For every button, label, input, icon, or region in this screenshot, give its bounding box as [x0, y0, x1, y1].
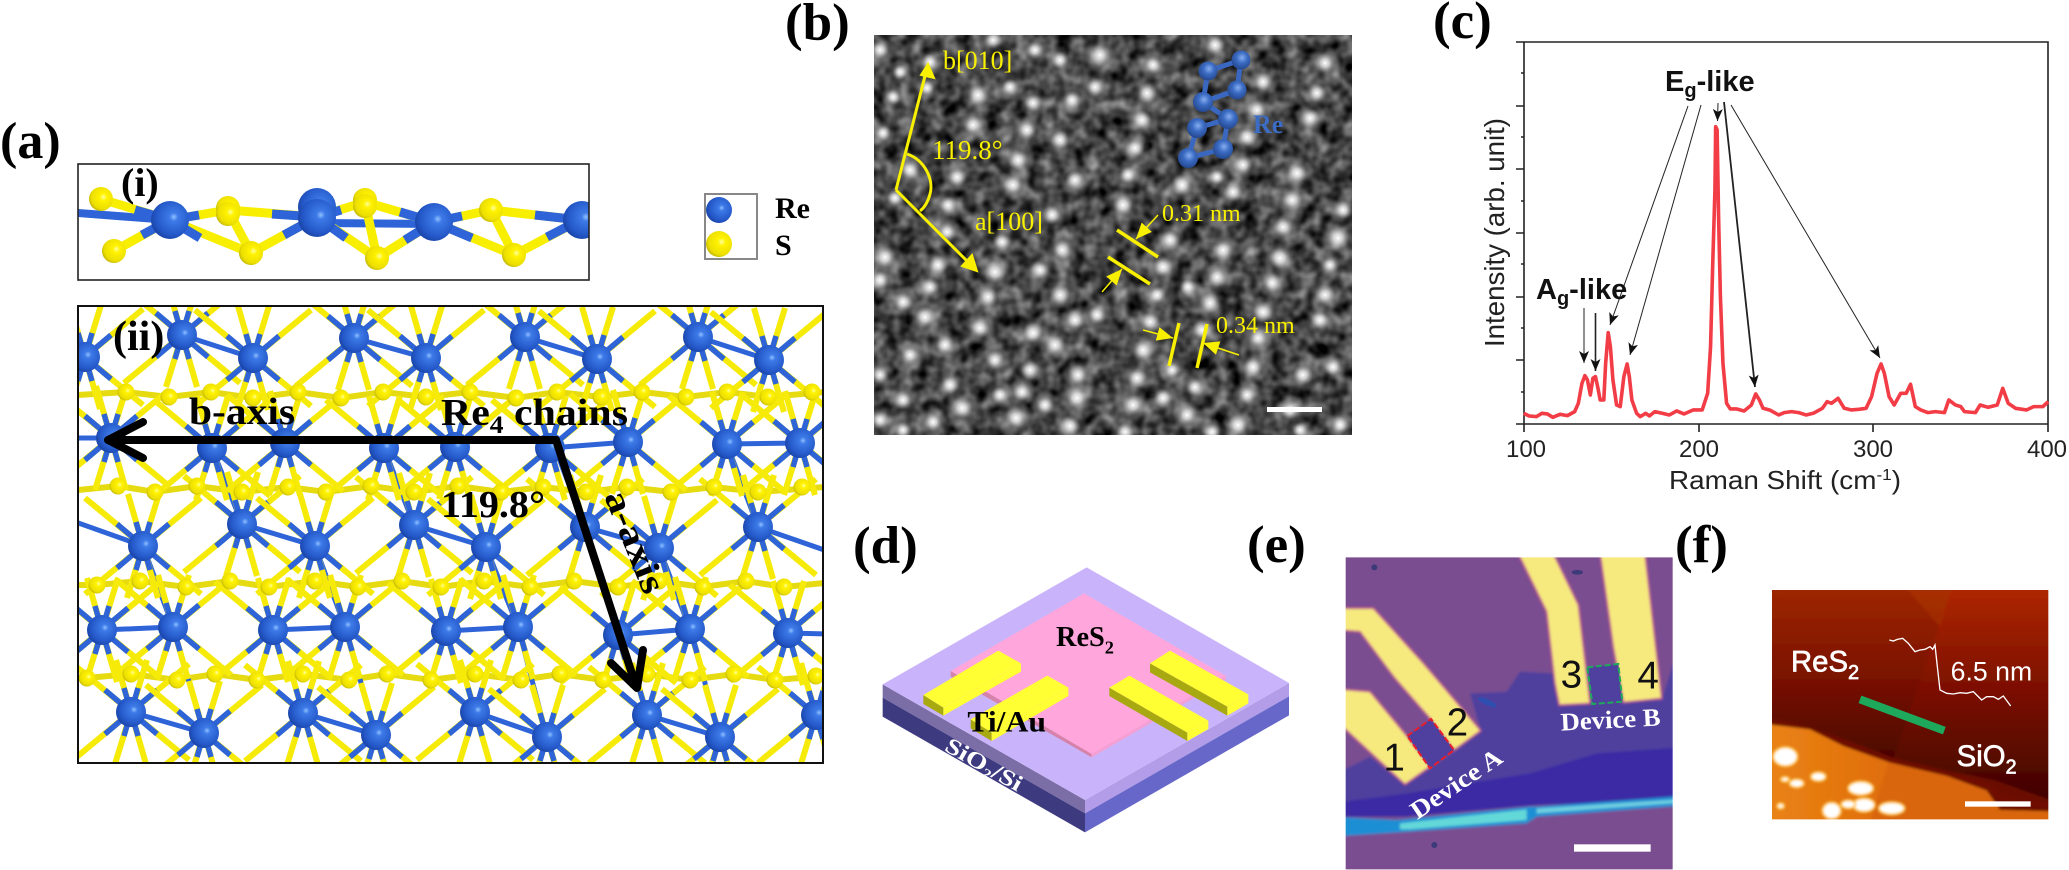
- label: Device B: Device B: [1560, 703, 1661, 737]
- micrograph background: [1346, 557, 1673, 870]
- panel: AFM image of flake: [1772, 590, 2048, 820]
- panel: top view of ReS2 lattice (ii): [77, 305, 824, 764]
- x tick labels: 200: [1679, 436, 1719, 463]
- flake region: [1346, 665, 1673, 802]
- scale bar: [1965, 801, 2031, 807]
- label: Eg-like: -like: [1697, 66, 1755, 98]
- scale bar: [1574, 844, 1651, 852]
- panel: side view of ReS2 lattice (i): [78, 160, 601, 280]
- x tick labels: 300: [1853, 436, 1893, 463]
- electrode numbers: 3: [1561, 654, 1582, 697]
- label: ReS2: ReS: [1791, 646, 1848, 679]
- defects: [1371, 564, 1583, 848]
- flake region: [1772, 590, 1952, 758]
- electrode numbers: 1: [1383, 737, 1405, 780]
- label: ReS2: ReS: [1056, 622, 1105, 653]
- scale bar: [1267, 407, 1322, 412]
- label: Re4 chains: chains: [504, 392, 628, 434]
- x axis title: Raman Shift (cm: [1669, 465, 1863, 495]
- arrow: b-axis: [108, 422, 556, 458]
- edge band: [1772, 719, 1944, 775]
- white particles: [1773, 747, 1904, 819]
- sub-label (i): (i): [121, 160, 159, 205]
- label: SiO2/Si: /Si: [987, 758, 1027, 796]
- label: ReS2: 2: [1848, 662, 1859, 684]
- measurement: 0.31 nm: [1102, 201, 1241, 292]
- channel device A: [1407, 719, 1454, 768]
- axes frame: [1516, 42, 2048, 432]
- electrode numbers: 4: [1637, 654, 1659, 697]
- label: 6.5 nm: 6.5 nm: [1951, 657, 2032, 687]
- y axis title: Intensity (arb. unit): [1479, 118, 1510, 347]
- label: Ag-like: -like: [1569, 274, 1627, 306]
- label: Eg-like: g: [1684, 80, 1697, 102]
- electrode numbers: 2: [1447, 701, 1468, 744]
- overlay: Re chain model: Re: [1253, 110, 1283, 139]
- panel: STEM image of ReS2 lattice: [865, 25, 1358, 447]
- spectrum curve: [1524, 127, 2048, 417]
- panel label (d): (d): [853, 517, 918, 575]
- arrows: crystal axes with angle: [896, 64, 977, 271]
- label: Eg-like: E: [1665, 66, 1684, 98]
- x tick labels: 400: [2027, 436, 2067, 463]
- label: ReS2: 2: [1105, 637, 1114, 657]
- label: a-axis: a-axis: [597, 484, 674, 599]
- substrate region: [1894, 590, 2048, 800]
- panel: optical micrograph of devices: [1346, 557, 1673, 870]
- panel label (f): (f): [1675, 516, 1728, 574]
- ReS2 flake: [951, 593, 1226, 757]
- electrodes: [1330, 540, 1662, 784]
- green line profile marker: [1860, 699, 1944, 731]
- peak arrows: [1584, 102, 1880, 387]
- legend: Re and S atoms: Re: [775, 192, 810, 225]
- label: SiO2: SiO: [1957, 740, 2006, 773]
- label: 119.8 degrees: 119.8°: [932, 135, 1003, 165]
- substrate side faces: [883, 683, 1289, 832]
- measurement: 0.31 nm: 0.31 nm: [1162, 201, 1241, 227]
- lighter flake corner: [1910, 590, 1950, 624]
- electrodes: [923, 651, 1248, 741]
- label: Re4 chains: 4: [490, 412, 504, 439]
- label: 119.8 degrees: 119.8°: [441, 484, 545, 526]
- measurement: 0.34 nm: 0.34 nm: [1216, 313, 1295, 339]
- label: SiO2/Si: SiO: [941, 733, 985, 772]
- arrow: a-axis: [556, 440, 643, 688]
- label: Ag-like: A: [1536, 274, 1557, 306]
- label: a[100]: a[100]: [975, 207, 1043, 236]
- x axis title: ): [1892, 465, 1901, 495]
- panel label (e): (e): [1247, 516, 1306, 574]
- bright cyan edge: [1330, 795, 1690, 837]
- x tick labels: [1506, 436, 2067, 463]
- label: SiO2/Si: 2: [979, 766, 994, 783]
- panel label (a): (a): [0, 113, 61, 170]
- label: b-axis: b-axis: [189, 391, 295, 433]
- measurement: 0.34 nm: [1143, 313, 1295, 368]
- substrate top face: [883, 567, 1289, 800]
- orange lower region: [1772, 722, 2048, 820]
- label: Ag-like: g: [1557, 288, 1569, 310]
- AFM height map: [1772, 590, 2048, 820]
- label: Ti/Au: Ti/Au: [967, 707, 1046, 739]
- fold line: [1872, 760, 2048, 820]
- panel: device schematic: [883, 567, 1289, 832]
- label: b[010]: b[010]: [943, 46, 1012, 75]
- legend: Re and S atoms: [705, 192, 810, 262]
- channel device B: [1587, 664, 1622, 704]
- label: Re4 chains: Re: [441, 392, 485, 434]
- x axis title: -1: [1876, 467, 1892, 484]
- sub-label (ii): (ii): [113, 314, 164, 360]
- chart: Raman spectrum: [1479, 42, 2067, 495]
- electrode numbers: [1383, 654, 1659, 780]
- height profile trace: [1889, 638, 2011, 706]
- x tick labels: 100: [1506, 436, 1546, 463]
- label: Device A: Device A: [1405, 743, 1508, 825]
- legend: Re and S atoms: S: [775, 229, 792, 262]
- label: SiO2: 2: [2006, 756, 2017, 778]
- darker flake band: [1330, 747, 1690, 817]
- overlay: Re chain model: [1178, 50, 1283, 168]
